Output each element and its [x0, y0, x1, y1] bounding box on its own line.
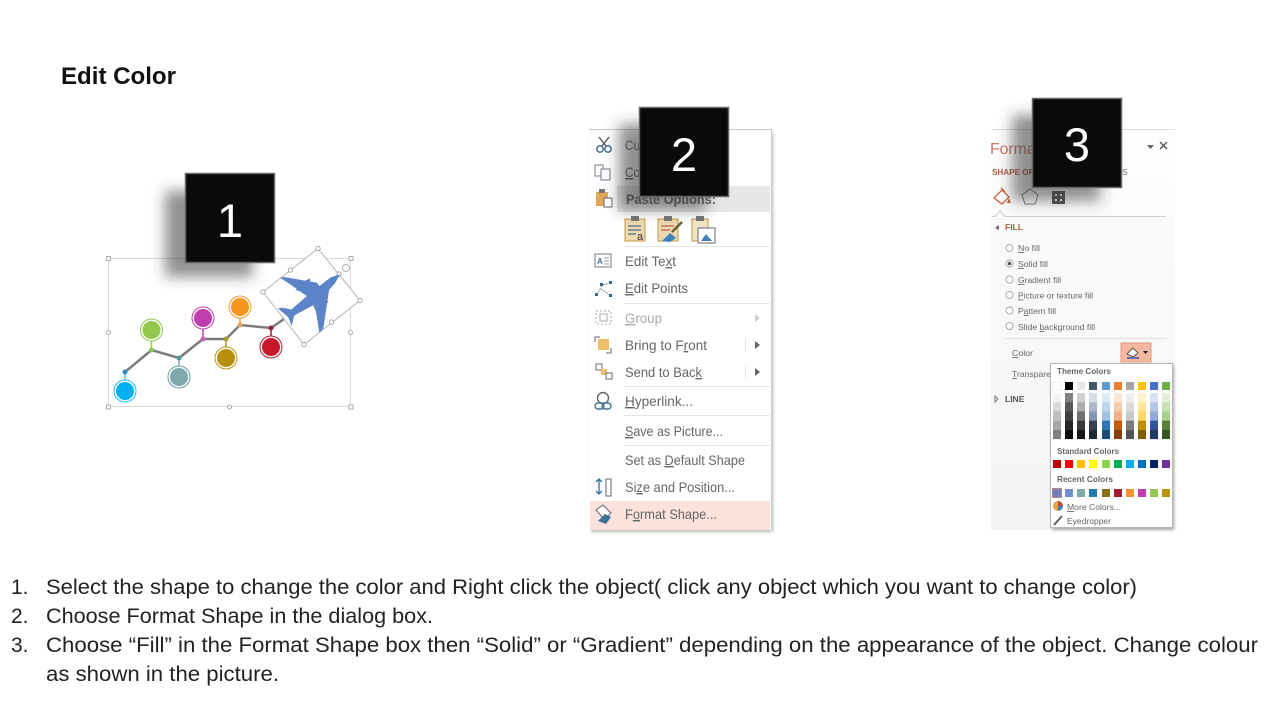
theme colors heading: Theme Colors [1057, 366, 1111, 376]
menu labels: Save as Picture... [625, 423, 723, 439]
tab label: S [1122, 167, 1128, 177]
badge: step 2: 2 [671, 128, 697, 181]
step 1 instruction: 1. [11, 576, 29, 599]
fill section divider [1005, 338, 1166, 340]
fill section heading: FILL [1005, 222, 1023, 232]
menu labels: Group [625, 310, 662, 326]
fill radio options: Solid fill [1018, 259, 1048, 269]
pane heading: Format [990, 141, 1041, 158]
node: mustard [215, 347, 237, 369]
step 2 instruction: 2. [11, 605, 29, 628]
icon: hyperlink [595, 392, 611, 409]
standard colors row [1053, 460, 1170, 468]
fill radio options [1006, 243, 1095, 332]
fill radio options: Slide background fill [1018, 322, 1095, 332]
timeline stems [125, 316, 271, 382]
node: red [260, 336, 282, 358]
icon: edit text: A [597, 257, 603, 266]
icon: airplane [278, 274, 340, 333]
line section heading: LINE [1005, 394, 1025, 404]
icon: edit points [595, 281, 612, 297]
timeline line [125, 319, 284, 372]
menu labels: Paste Options: [626, 191, 716, 207]
fill radio options: Picture or texture fill [1018, 290, 1093, 300]
node: green [140, 319, 162, 341]
badge: step 1: 1 [217, 194, 243, 247]
line section heading [995, 394, 1025, 404]
recent colors row [1052, 488, 1170, 498]
panel: step 2 context menu [589, 129, 773, 532]
fill radio options: Pattern fill [1018, 306, 1056, 316]
icon row: fill, pentagon, size [994, 188, 1065, 204]
menu labels: Hyperlink... [625, 393, 693, 409]
color picker popup [1050, 364, 1174, 530]
plane selection box [261, 246, 362, 347]
eyedropper option: Eyedropper [1067, 516, 1111, 526]
more colors option: More Colors... [1067, 502, 1121, 512]
icon: size and position [596, 479, 611, 496]
pane top edge [991, 129, 1175, 130]
theme colors row [1053, 382, 1170, 390]
step 1 instruction: Select the shape to change the color and Right click the object( click any object which you want to change color) [46, 576, 1137, 599]
color row [1012, 343, 1151, 362]
submenu arrows [755, 314, 760, 376]
selection box [106, 256, 353, 409]
menu labels: Edit Points [625, 280, 688, 296]
theme color shades [1053, 393, 1170, 439]
badge: step 3: 3 [1064, 118, 1090, 171]
pane close controls [1147, 142, 1167, 149]
icons: paste options [625, 216, 715, 243]
highlighted row: paste options [617, 186, 770, 212]
node: orange [229, 296, 251, 318]
icon: paste [596, 189, 612, 207]
node: blue [114, 380, 136, 402]
icon: copy [595, 165, 610, 180]
badge: step 2 [619, 108, 728, 210]
menu separators [624, 246, 770, 446]
color row: Color [1012, 348, 1033, 358]
step 3 instruction [11, 634, 1258, 686]
node: magenta [192, 307, 214, 329]
fill radio options: No fill [1018, 243, 1040, 253]
standard colors heading: Standard Colors [1057, 446, 1119, 456]
panel: step 1 selected timeline graphic [106, 246, 362, 409]
tab label: SHAPE OP [992, 167, 1034, 177]
recent colors heading: Recent Colors [1057, 474, 1113, 484]
menu labels: Co [625, 164, 640, 180]
menu labels: Size and Position... [625, 479, 735, 495]
icons: paste options: a [637, 231, 644, 243]
menu background [589, 129, 773, 532]
panel: step 3 format shape pane [990, 129, 1175, 530]
menu labels: Set as Default Shape [625, 452, 745, 468]
node: teal [168, 366, 190, 388]
timeline junction dots [122, 322, 274, 374]
icon: format shape [596, 505, 611, 524]
tab label [992, 167, 1128, 177]
fill radio options: Gradient fill [1018, 275, 1061, 285]
menu labels: Send to Back [625, 364, 703, 380]
icon: edit text [595, 254, 611, 267]
menu labels: Format Shape... [625, 506, 717, 522]
badge: step 1 [165, 174, 274, 277]
badge: step 3 [1012, 98, 1122, 201]
transparency label: Transpare [1012, 369, 1051, 379]
icon: bring to front [595, 337, 611, 353]
icon: send to back [596, 364, 612, 379]
pane background [991, 129, 1175, 530]
menu labels: Edit Text [625, 253, 676, 269]
step 3 instruction: as shown in the picture. [46, 663, 279, 686]
step 2 instruction: Choose Format Shape in the dialog box. [46, 605, 433, 628]
step 3 instruction: 3. [11, 634, 29, 657]
menu labels: Cu [625, 137, 640, 153]
instructions list [11, 576, 1258, 686]
highlighted row: format shape [590, 501, 770, 530]
icon row divider [992, 211, 1166, 216]
title: Edit Color [61, 63, 176, 90]
step 3 instruction: Choose “Fill” in the Format Shape box then “Solid” or “Gradient” depending on the appearance of the object. Change colour [46, 634, 1258, 657]
menu labels: Bring to Front [625, 337, 707, 353]
icon: scissors [597, 137, 611, 152]
icon: group [596, 311, 611, 324]
fill section heading [995, 222, 1023, 232]
menu labels [625, 137, 745, 522]
